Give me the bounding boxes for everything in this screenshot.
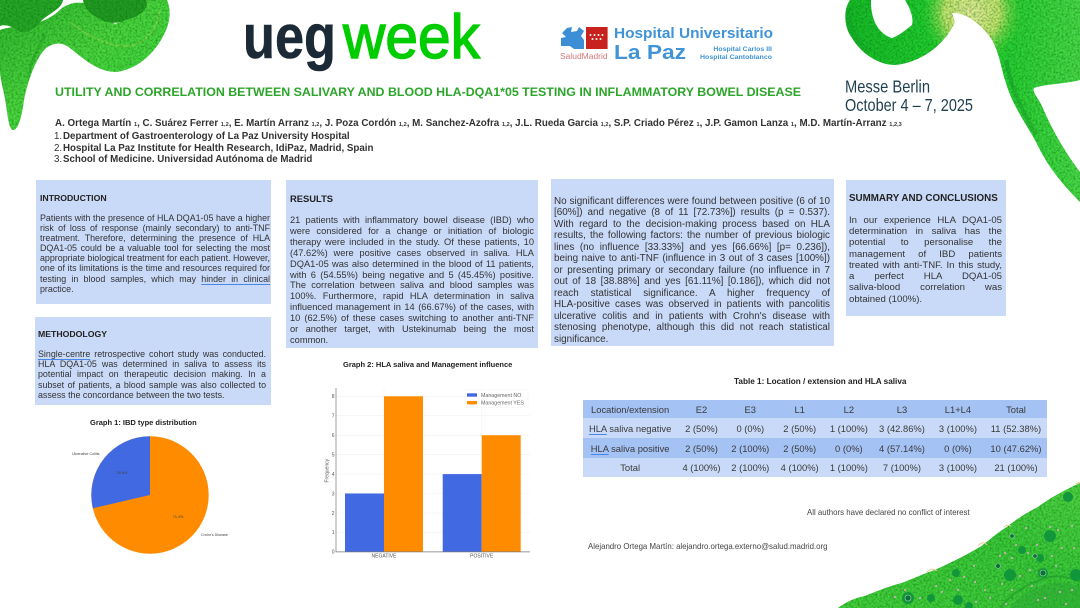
bar chart: HLA saliva and management influence: 6 <box>332 433 335 439</box>
affiliations <box>54 131 373 165</box>
text: introduction body: appropriate biological treatment for each patient. However, <box>40 253 270 263</box>
text: introduction body: Patients with the presence of HLA DQA1-05 have a higher <box>40 213 270 223</box>
table: location extension and HLA saliva: L1 <box>794 404 805 415</box>
text: results body: influenced management in 14 (66.67%) of the cases, with <box>290 302 534 312</box>
affiliations: 2. <box>54 143 62 154</box>
table: location extension and HLA saliva: 10 (47.62%) <box>990 443 1042 454</box>
illustration: green organic shape top left <box>0 0 170 130</box>
bar chart: HLA saliva and management influence: 5 <box>332 452 335 458</box>
text: introduction body: one of its limitations is the time and resources required for <box>40 263 270 273</box>
table: location extension and HLA saliva: E3 <box>745 404 756 415</box>
legend: Management YES <box>481 401 524 407</box>
logo: Hospital Universitario La Paz: Hospital Cantoblanco <box>700 54 772 61</box>
bar chart: HLA saliva and management influence <box>324 388 530 560</box>
text: results continued body: results, the following factors: the number of previous biologic <box>554 230 830 241</box>
text: introduction body: DQA1-05 could be a valuable tool for selecting the most <box>40 243 270 253</box>
table: location extension and HLA saliva: L2 <box>844 404 854 415</box>
table: location extension and HLA saliva: 2 (50%) <box>783 443 816 454</box>
table: location extension and HLA saliva: Total <box>620 462 640 473</box>
affiliations: Hospital La Paz Institute for Health Research, IdiPaz, Madrid, Spain <box>63 143 373 154</box>
heading: graph 2: Graph 2: HLA saliva and Management influence <box>343 360 512 369</box>
heading: graph 1: Graph 1: IBD type distribution <box>90 418 197 427</box>
table: location extension and HLA saliva: 11 (52.38%) <box>991 423 1041 434</box>
text: introduction body: testing in blood samples, which may hinder in clinical <box>40 274 270 284</box>
logo: UEG Week: ueg <box>243 5 336 72</box>
text: introduction body: practice. <box>40 284 74 294</box>
table: location extension and HLA saliva: HLA saliva positive <box>591 443 669 454</box>
pie chart: IBD type distribution: Crohn's Disease <box>201 533 228 537</box>
title: UTILITY AND CORRELATION BETWEEN SALIVARY AND BLOOD HLA-DQA1*05 TESTING IN INFLAMMATORY BOWEL DISEASE <box>55 85 801 99</box>
text: summary body: a perfect HLA DQA1-05 <box>849 271 1002 282</box>
table: location extension and HLA saliva: 4 (100%) <box>682 462 720 473</box>
illustration: green swirl top right <box>845 0 1080 202</box>
table: location extension and HLA saliva: 1 (100%) <box>830 423 868 434</box>
text: results continued body: ulcerative colitis and in patients with Crohn's disease with <box>554 311 830 322</box>
table: location extension and HLA saliva: 2 (100%) <box>731 443 769 454</box>
bar chart: HLA saliva and management influence: 2 <box>332 511 335 517</box>
legend <box>465 390 528 407</box>
illustration: green textured shape bottom right <box>838 482 1080 608</box>
text: methodology body: assess the concordance between the two tests. <box>38 390 224 400</box>
text: results body: The correlation between saliva and blood samples was <box>290 280 534 290</box>
table: location extension and HLA saliva: 2 (50%) <box>783 423 816 434</box>
bar chart: HLA saliva and management influence: Frequency <box>324 458 330 483</box>
affiliations: Department of Gastroenterology of La Paz University Hospital <box>63 131 350 142</box>
table: location extension and HLA saliva: 0 (0%) <box>736 423 764 434</box>
bar chart: HLA saliva and management influence: POSITIVE <box>470 554 494 560</box>
text: results continued body <box>554 196 830 345</box>
affiliations: 3. <box>54 154 62 165</box>
icon: Salud Madrid blue emblem <box>561 27 584 49</box>
text: results body <box>290 215 534 345</box>
text: results body: were considered for a change or initiation of biologic <box>290 226 534 236</box>
table: location extension and HLA saliva: 0 (0%) <box>835 443 863 454</box>
text: introduction body <box>40 213 270 294</box>
bar chart: HLA saliva and management influence: 1 <box>332 530 335 536</box>
text: results continued body: lines (no influence [33.33%] and yes [66.66%] [p= 0.236]), <box>554 242 830 253</box>
text: results body: or another target, with Ustekinumab being the most <box>290 324 534 334</box>
bar chart: HLA saliva and management influence: 0 <box>332 550 335 556</box>
text: results continued body: out of 18 [38.88%] and yes [61.11%] [0.186]), which did not <box>554 276 830 287</box>
text: results body: (47.62%) were positive cases observed in saliva. HLA <box>290 248 534 258</box>
table: location extension and HLA saliva: 2 (100%) <box>731 462 769 473</box>
table: location extension and HLA saliva: 3 (100%) <box>939 462 977 473</box>
logo: Hospital Universitario La Paz <box>560 26 773 62</box>
panel: introduction <box>36 180 271 304</box>
text: results body: 10 (62.5%) of these cases switching to another anti-TNF <box>290 313 534 323</box>
table: location extension and HLA saliva: 3 (100%) <box>939 423 977 434</box>
text: summary body: potential to personalise the <box>849 237 1002 248</box>
table: location extension and HLA saliva: L1+L4 <box>945 404 971 415</box>
text: results continued body: stenosing phenotype, although this did not reach statistical <box>554 322 830 333</box>
bar chart: HLA saliva and management influence: 8 <box>332 394 335 400</box>
table: location extension and HLA saliva: 7 (100%) <box>883 462 921 473</box>
table: location extension and HLA saliva: L3 <box>897 404 907 415</box>
text: methodology body: Single-centre retrospective cohort study was conducted. <box>38 349 266 359</box>
text: methodology body <box>38 349 266 400</box>
text: methodology body: potential impact on therapeutic decision making. In a <box>38 369 266 379</box>
table: location extension and HLA saliva: 3 (42.86%) <box>879 423 925 434</box>
text: results continued body: reach statistical significance. A higher frequency of <box>554 288 830 299</box>
bar chart: HLA saliva and management influence: 4 <box>332 472 335 478</box>
bar chart: HLA saliva and management influence: 7 <box>332 414 335 420</box>
logo: UEG Week <box>243 5 482 72</box>
text: summary body <box>849 215 1002 305</box>
text: summary body: treated with anti-TNF. In this study, <box>849 260 1002 271</box>
text: results continued body: HLA-positive cases was observed in patients with pancolitis <box>554 299 830 310</box>
heading: introduction: INTRODUCTION <box>40 193 107 203</box>
pie chart: IBD type distribution: 28.6% <box>117 471 128 475</box>
event place and date: Messe Berlin <box>845 77 930 97</box>
table: location extension and HLA saliva: 21 (100%) <box>994 462 1038 473</box>
panel: results continued <box>551 179 834 346</box>
table: location extension and HLA saliva: Location/extension <box>591 404 669 415</box>
logo: UEG Week: week <box>342 5 481 72</box>
table: location extension and HLA saliva: 4 (57.14%) <box>879 443 925 454</box>
text: summary body: saliva-blood correlation was <box>849 282 1002 293</box>
text: results body: with 6 (54.55%) being negative and 5 (45.45%) positive. <box>290 270 534 280</box>
icon: Madrid red flag <box>586 27 608 49</box>
text: results continued body: significance. <box>554 334 608 345</box>
text: results body: DQA1-05 was also determined in the blood of 11 patients, <box>290 259 534 269</box>
text: summary body: management of IBD patients <box>849 249 1002 260</box>
table: location extension and HLA saliva: 2 (50%) <box>685 443 718 454</box>
pie chart: IBD type distribution: 71.4% <box>173 515 184 519</box>
table: location extension and HLA saliva <box>583 400 1047 477</box>
text: methodology body: HLA DQA1-05 was determined in saliva to assess its <box>38 359 266 369</box>
panel: results <box>286 180 538 348</box>
heading: methodology: METHODOLOGY <box>38 329 107 339</box>
pie chart: IBD type distribution: Ulcerative Colitis <box>72 452 100 456</box>
pie chart: IBD type distribution <box>72 436 228 554</box>
bar chart: HLA saliva and management influence: 3 <box>332 491 335 497</box>
heading: summary and conclusions: SUMMARY AND CONCLUSIONS <box>849 193 998 204</box>
table: location extension and HLA saliva: E2 <box>696 404 707 415</box>
affiliations: 1. <box>54 131 62 142</box>
text: summary body: determination in saliva has the <box>849 226 1002 237</box>
note: conflict of interest: All authors have declared no conflict of interest <box>807 508 970 517</box>
logo: Hospital Universitario La Paz: SaludMadrid <box>560 52 608 61</box>
table: location extension and HLA saliva: 0 (0%) <box>944 443 972 454</box>
text: results body: 100%. Furthermore, rapid HLA determination in saliva <box>290 291 534 301</box>
text: introduction body: risk of loss of response (mainly secondary) to anti-TNF <box>40 223 270 233</box>
bar chart: HLA saliva and management influence: NEGATIVE <box>372 554 397 560</box>
heading: results: RESULTS <box>290 193 333 204</box>
authors: A. Ortega Martín 1, C. Suárez Ferrer 1,2, E. Martín Arranz 1,2, J. Poza Cordón 1,2, M. Sanchez-Azofra 1,2, J.L. Rueda Garcia 1,2, S.P. Criado Pérez 1, J.P. Gamon Lanza 1, M.D. Martín-Arranz 1,2,3 <box>55 118 902 129</box>
text: results body: common. <box>290 335 328 345</box>
table: location extension and HLA saliva: 1 (100%) <box>830 462 868 473</box>
text: results continued body: No significant differences were found between positive (6 of 10 <box>554 196 830 207</box>
text: methodology body: subset of patients, a blood sample was also collected to <box>38 380 266 390</box>
text: results continued body: being naive to anti-TNF (influence in 3 out of 3 cases [100%]) <box>554 253 830 264</box>
affiliations: School of Medicine. Universidad Autónoma de Madrid <box>63 154 312 165</box>
text: results continued body: or presenting primary or secondary failure (no influence in 7 <box>554 265 830 276</box>
text: summary body: In our experience HLA DQA1-05 <box>849 215 1002 226</box>
text: results body: therapy were included in the study. Of these patients, 10 <box>290 237 534 247</box>
contact: Alejandro Ortega Martín: alejandro.ortega.externo@salud.madrid.org <box>588 542 827 551</box>
text: summary body: obtained (100%). <box>849 294 922 305</box>
table: location extension and HLA saliva: 2 (50%) <box>685 423 718 434</box>
panel: summary and conclusions <box>846 180 1006 316</box>
text: introduction body: treatment. Therefore, determining the presence of HLA <box>40 233 270 243</box>
table: location extension and HLA saliva: HLA saliva negative <box>589 423 671 434</box>
logo: Hospital Universitario La Paz: Hospital Universitario <box>614 26 773 42</box>
text: results continued body: With regard to the decision-making process based on HLA <box>554 219 830 230</box>
event place and date <box>845 77 973 115</box>
text: results body: 21 patients with inflammatory bowel disease (IBD) who <box>290 215 534 225</box>
panel: methodology <box>35 317 271 405</box>
legend: Management NO <box>481 393 521 399</box>
table: location extension and HLA saliva: 4 (100%) <box>781 462 819 473</box>
text: results continued body: [60%]) and negative (8 of 11 [72.73%]) results (p = 0.537). <box>554 207 830 218</box>
table: location extension and HLA saliva: Total <box>1006 404 1026 415</box>
logo: Hospital Universitario La Paz: Hospital Carlos III <box>713 46 772 53</box>
heading: table 1: Table 1: Location / extension and HLA saliva <box>734 377 906 386</box>
